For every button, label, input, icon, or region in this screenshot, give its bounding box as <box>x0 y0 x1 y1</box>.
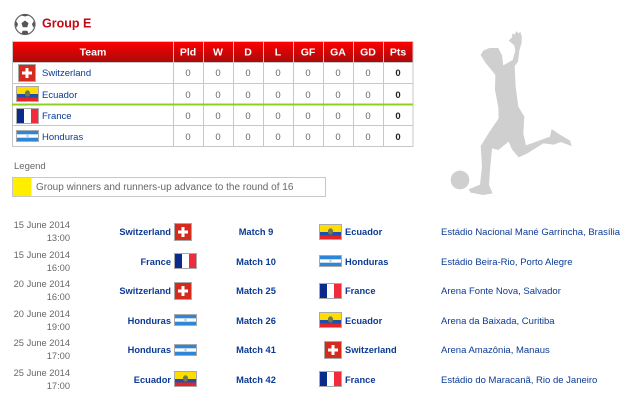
row: Ecuador: 0 <box>275 90 281 101</box>
legend box <box>12 178 326 196</box>
table header: Pld <box>180 46 196 58</box>
match 42 <box>14 368 597 391</box>
match 41: 17:00 <box>47 351 70 361</box>
row: Ecuador: 0 <box>365 90 371 101</box>
silhouette: player kicking ball <box>451 31 572 195</box>
row: France: 0 <box>395 111 401 122</box>
match 9: Ecuador <box>345 227 383 237</box>
table header: D <box>244 46 252 58</box>
match 10: Estádio Beira-Rio, Porto Alegre <box>441 257 572 268</box>
match 25: France <box>345 286 376 296</box>
row: Ecuador: 0 <box>305 90 311 101</box>
row: Ecuador: 0 <box>185 90 191 101</box>
row: Switzerland: Switzerland <box>42 68 91 79</box>
match 10 <box>14 250 572 273</box>
row: Ecuador <box>16 86 401 102</box>
row: Switzerland <box>18 64 401 82</box>
row: Switzerland: 0 <box>335 68 341 79</box>
match 10: 16:00 <box>47 263 70 273</box>
match 25: Switzerland <box>119 286 171 296</box>
match 42: 25 June 2014 <box>14 368 70 378</box>
match 42: France <box>345 375 376 385</box>
row: Honduras: 0 <box>335 132 341 143</box>
row: Honduras <box>16 130 401 143</box>
row: Ecuador: 0 <box>215 90 221 101</box>
match 9: 13:00 <box>47 233 70 243</box>
match 9 <box>14 220 621 243</box>
row: Switzerland: 0 <box>215 68 221 79</box>
match 26: Match 26 <box>236 316 276 326</box>
table header: L <box>275 46 282 58</box>
row: Honduras: 0 <box>365 132 371 143</box>
legend heading: Legend <box>14 161 46 172</box>
match 26: Arena da Baixada, Curitiba <box>441 316 555 327</box>
row: Honduras: 0 <box>245 132 251 143</box>
table header: GF <box>301 46 316 58</box>
row: Honduras: 0 <box>305 132 311 143</box>
row: France <box>16 108 401 124</box>
row: Honduras: 0 <box>395 132 401 143</box>
table header: GA <box>330 46 346 58</box>
row: France: 0 <box>335 111 341 122</box>
legend box: Group winners and runners-up advance to the round of 16 <box>36 182 294 193</box>
match 25: Match 25 <box>236 286 276 296</box>
table header: W <box>213 46 223 58</box>
row: Switzerland: 0 <box>395 68 401 79</box>
table header: GD <box>360 46 376 58</box>
table header: Team <box>80 46 106 58</box>
match 25: 16:00 <box>47 292 70 302</box>
match 42: Match 42 <box>236 375 276 385</box>
row: Switzerland: 0 <box>275 68 281 79</box>
match 42: 17:00 <box>47 381 70 391</box>
row: France: 0 <box>215 111 221 122</box>
row: France: 0 <box>245 111 251 122</box>
row: Honduras: 0 <box>215 132 221 143</box>
table header <box>12 42 413 62</box>
match 26: 19:00 <box>47 322 70 332</box>
match 10: Match 10 <box>236 257 276 267</box>
row: Honduras: 0 <box>185 132 191 143</box>
match 26: Ecuador <box>345 316 383 326</box>
match 10: Honduras <box>345 257 388 267</box>
match 25: 20 June 2014 <box>14 279 70 289</box>
row: Honduras: Honduras <box>42 132 83 143</box>
match 9: Match 9 <box>239 227 273 237</box>
row: France: France <box>42 111 72 122</box>
match 41: Switzerland <box>345 345 397 355</box>
match 42: Estádio do Maracanã, Rio de Janeiro <box>441 375 597 386</box>
row: Switzerland: 0 <box>305 68 311 79</box>
match 41: Match 41 <box>236 345 276 355</box>
match 42: Ecuador <box>134 375 171 385</box>
match 41: Honduras <box>128 345 171 355</box>
row: France: 0 <box>275 111 281 122</box>
row: Switzerland: 0 <box>245 68 251 79</box>
match 26 <box>14 309 555 332</box>
match 41 <box>14 338 550 361</box>
match 41: Arena Amazônia, Manaus <box>441 345 550 356</box>
table header: Pts <box>390 46 406 58</box>
match 26: 20 June 2014 <box>14 309 70 319</box>
match 9: Switzerland <box>119 227 171 237</box>
row: Ecuador: 0 <box>335 90 341 101</box>
match 10: France <box>140 257 171 267</box>
title: Group E <box>42 16 91 30</box>
row: Honduras: 0 <box>275 132 281 143</box>
match 25: Arena Fonte Nova, Salvador <box>441 286 561 297</box>
match 9: 15 June 2014 <box>14 220 70 230</box>
row: France: 0 <box>365 111 371 122</box>
row: Switzerland: 0 <box>185 68 191 79</box>
row: France: 0 <box>185 111 191 122</box>
standings table <box>12 42 413 146</box>
match 9: Estádio Nacional Mané Garrincha, Brasília <box>441 227 621 238</box>
row: Switzerland: 0 <box>365 68 371 79</box>
row: Ecuador: 0 <box>395 90 401 101</box>
match 41: 25 June 2014 <box>14 338 70 348</box>
icon: soccer ball <box>15 14 35 35</box>
row: Ecuador: 0 <box>245 90 251 101</box>
row: France: 0 <box>305 111 311 122</box>
match 25 <box>14 279 561 302</box>
match 10: 15 June 2014 <box>14 250 70 260</box>
row: Ecuador: Ecuador <box>42 90 77 101</box>
match 26: Honduras <box>128 316 171 326</box>
